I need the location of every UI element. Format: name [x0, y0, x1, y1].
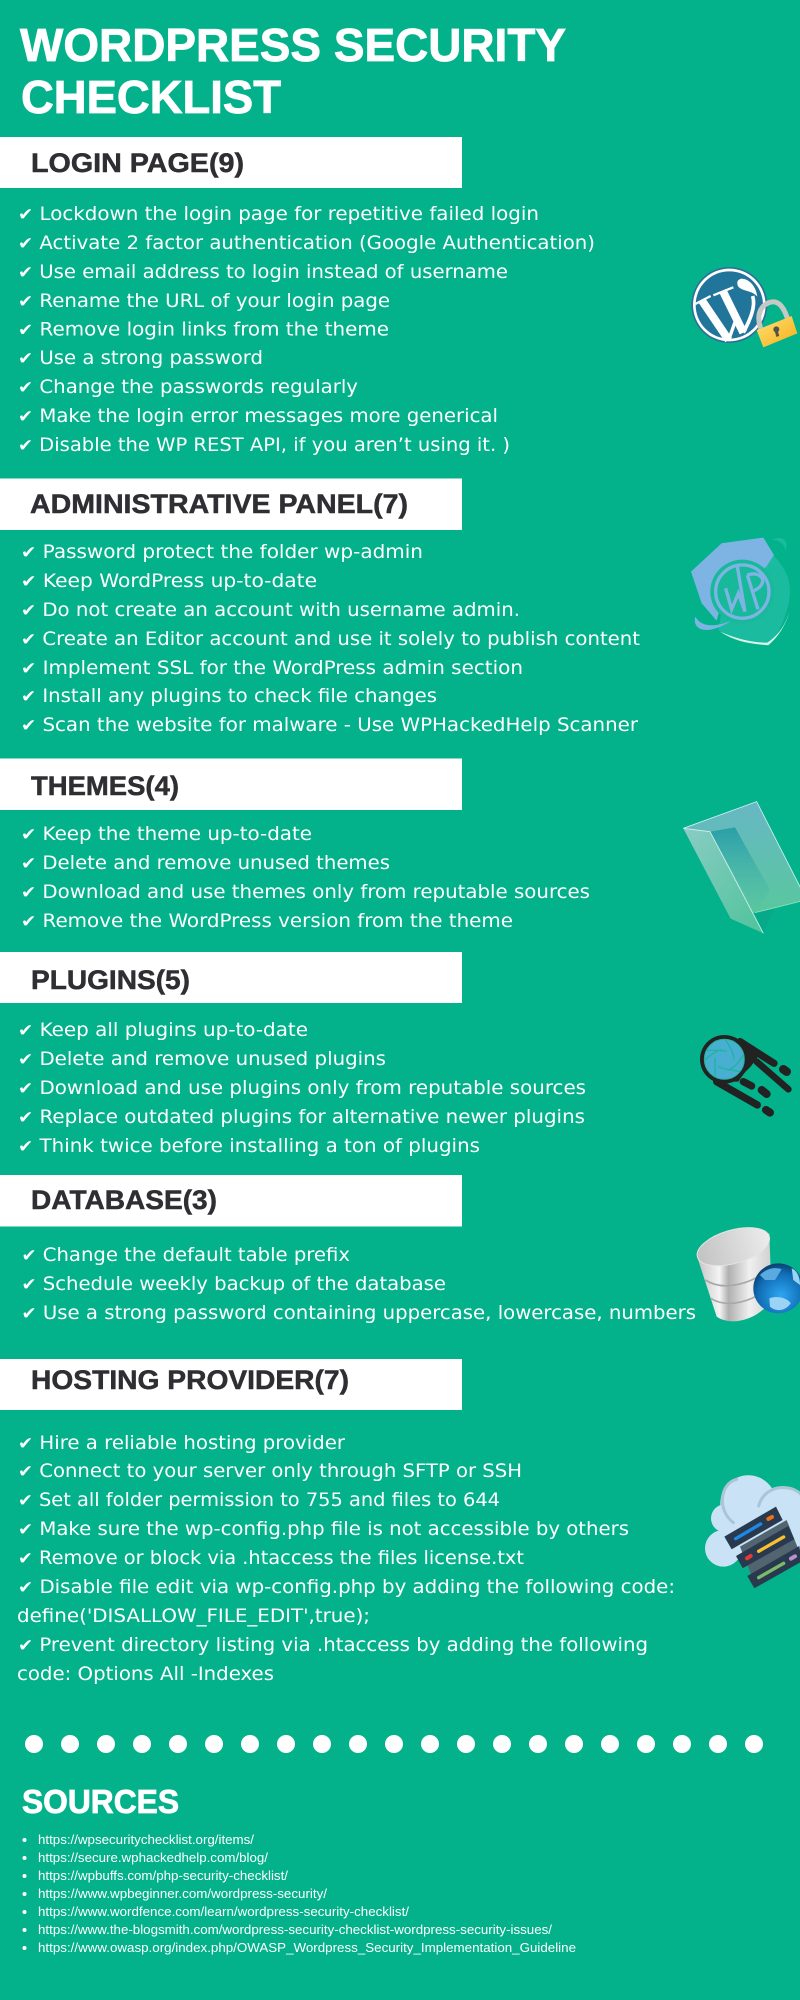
checklist: login page: ✔ Rename the URL of your login page [18, 291, 390, 312]
checklist: hosting provider [17, 1433, 675, 1685]
panel: database [0, 1175, 800, 1324]
heading: database: DATABASE(3) [31, 1185, 217, 1215]
dotted divider [25, 1735, 763, 1753]
checklist: plugins: ✔ Download and use plugins only from reputable sources [18, 1078, 586, 1099]
checklist: hosting provider: ✔ Set all folder permission to 755 and files to 644 [18, 1490, 500, 1511]
source list: https://www.wordfence.com/learn/wordpress-security-checklist/ [38, 1904, 409, 1919]
checklist: database: ✔ Schedule weekly backup of the database [22, 1274, 446, 1295]
checklist: plugins: ✔ Keep all plugins up-to-date [18, 1020, 308, 1041]
checklist: plugins [18, 1020, 586, 1157]
checklist: login page: ✔ Make the login error messages more generical [18, 406, 498, 427]
panel: sources [22, 1783, 576, 1955]
panel: login page [0, 137, 797, 456]
source list: https://www.wpbeginner.com/wordpress-security/ [38, 1886, 327, 1901]
source list: https://www.owasp.org/index.php/OWASP_Wordpress_Security_Implementation_Guideline [38, 1940, 576, 1955]
icon: glass folder [683, 802, 800, 933]
checklist: themes [21, 824, 590, 932]
checklist: administrative panel: ✔ Install any plugins to check file changes [21, 686, 437, 707]
title: CHECKLIST [21, 71, 281, 123]
heading: plugins: PLUGINS(5) [31, 965, 190, 995]
checklist: hosting provider: ✔ Make sure the wp-config.php file is not accessible by others [18, 1519, 629, 1540]
checklist: login page: ✔ Disable the WP REST API, if you aren’t using it. ) [18, 435, 510, 456]
heading: plugins [0, 952, 462, 1003]
checklist: hosting provider: define('DISALLOW_FILE_EDIT',true); [17, 1606, 370, 1627]
heading: sources: SOURCES [22, 1783, 179, 1820]
checklist: login page: ✔ Use email address to login instead of username [18, 262, 508, 283]
checklist: database: ✔ Use a strong password containing uppercase, lowercase, numbers [22, 1303, 696, 1324]
heading: themes [0, 758, 462, 810]
checklist: themes: ✔ Remove the WordPress version from the theme [21, 911, 513, 932]
checklist: administrative panel: ✔ Create an Editor account and use it solely to publish content [21, 629, 640, 650]
source list: https://wpbuffs.com/php-security-checklist/ [38, 1868, 288, 1883]
checklist: themes: ✔ Keep the theme up-to-date [21, 824, 312, 845]
heading: database [0, 1175, 462, 1226]
source list [22, 1832, 576, 1955]
checklist: database [22, 1245, 696, 1324]
checklist: administrative panel [21, 542, 640, 736]
icon: wp shield [691, 538, 790, 645]
heading: login page: LOGIN PAGE(9) [31, 148, 244, 178]
title: WORDPRESS SECURITY [20, 19, 566, 71]
checklist: plugins: ✔ Replace outdated plugins for alternative newer plugins [18, 1107, 585, 1128]
heading: hosting provider [0, 1359, 462, 1410]
icon: cloud server [705, 1475, 800, 1588]
heading: hosting provider: HOSTING PROVIDER(7) [31, 1365, 349, 1395]
checklist: login page: ✔ Lockdown the login page for repetitive failed login [18, 204, 539, 225]
checklist: hosting provider: code: Options All -Indexes [17, 1664, 274, 1685]
checklist: database: ✔ Change the default table prefix [22, 1245, 350, 1266]
checklist: login page: ✔ Activate 2 factor authentication (Google Authentication) [18, 233, 595, 254]
checklist: administrative panel: ✔ Implement SSL for the WordPress admin section [21, 658, 523, 679]
checklist: login page [18, 204, 595, 456]
source list: https://secure.wphackedhelp.com/blog/ [38, 1850, 268, 1865]
checklist: administrative panel: ✔ Keep WordPress up-to-date [21, 571, 317, 592]
title [20, 19, 566, 123]
checklist: themes: ✔ Delete and remove unused themes [21, 853, 390, 874]
icon: database and globe [693, 1220, 800, 1321]
checklist: hosting provider: ✔ Disable file edit via wp-config.php by adding the following code: [18, 1577, 675, 1598]
checklist: administrative panel: ✔ Do not create an account with username admin. [21, 600, 520, 621]
icon: speed shutter [700, 1035, 788, 1113]
icon: wordpress logo with padlock [691, 267, 797, 347]
panel: hosting provider [0, 1359, 800, 1685]
panel: plugins [0, 952, 788, 1157]
source list: https://wpsecuritychecklist.org/items/ [38, 1832, 254, 1847]
checklist: hosting provider: ✔ Prevent directory listing via .htaccess by adding the following [18, 1635, 648, 1656]
heading: login page [0, 137, 462, 188]
heading: administrative panel [0, 478, 462, 530]
checklist: hosting provider: ✔ Hire a reliable hosting provider [18, 1433, 345, 1454]
checklist: hosting provider: ✔ Connect to your server only through SFTP or SSH [18, 1461, 522, 1482]
panel: themes [0, 758, 800, 933]
checklist: themes: ✔ Download and use themes only from reputable sources [21, 882, 590, 903]
checklist: administrative panel: ✔ Password protect the folder wp-admin [21, 542, 423, 563]
checklist: login page: ✔ Change the passwords regularly [18, 377, 358, 398]
checklist: plugins: ✔ Think twice before installing a ton of plugins [18, 1136, 480, 1157]
source list: https://www.the-blogsmith.com/wordpress-security-checklist-wordpress-security-issues/ [38, 1922, 552, 1937]
checklist: administrative panel: ✔ Scan the website for malware - Use WPHackedHelp Scanner [21, 715, 638, 736]
checklist: plugins: ✔ Delete and remove unused plugins [18, 1049, 386, 1070]
heading: administrative panel: ADMINISTRATIVE PANEL(7) [30, 489, 408, 519]
checklist: login page: ✔ Remove login links from the theme [18, 320, 389, 340]
panel: administrative panel [0, 478, 790, 736]
checklist: login page: ✔ Use a strong password [18, 348, 263, 369]
checklist: hosting provider: ✔ Remove or block via .htaccess the files license.txt [18, 1548, 524, 1569]
heading: themes: THEMES(4) [31, 771, 179, 801]
